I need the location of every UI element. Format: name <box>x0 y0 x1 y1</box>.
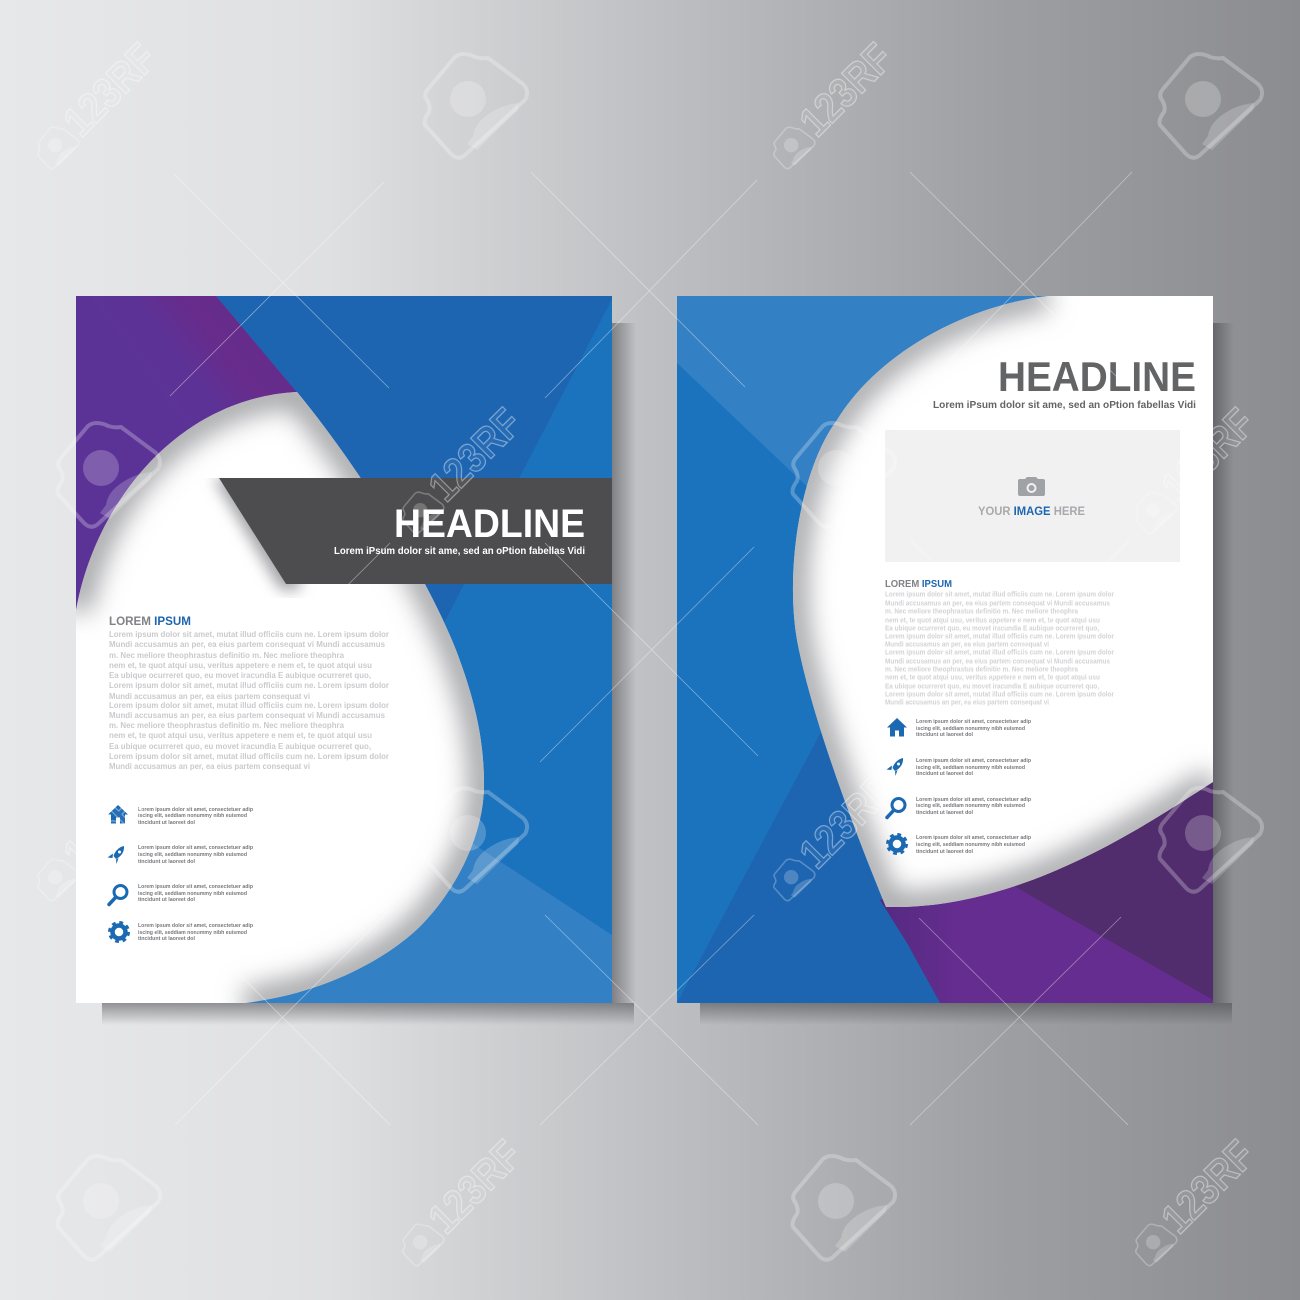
feature text 4: iscing elit, seddiam nonummy nibh euismod <box>138 930 247 936</box>
watermark: small camera marks <box>38 127 1177 1266</box>
pale blue upper facet <box>677 296 1100 575</box>
body text: Mundi accusamus an per, ea eius partem consequat vi <box>885 642 1049 648</box>
watermark: text marks: 123RF <box>1152 1131 1263 1242</box>
body text: nem et, te quot atqui usu, veritus appetere e nem et, te quot atqui usu <box>109 730 372 740</box>
feature text 2 <box>916 758 1031 777</box>
body text: Lorem ipsum dolor sit amet, mutat illud officiis cum ne. Lorem ipsum dolor <box>885 650 1114 656</box>
icon: gear <box>888 834 906 854</box>
body text <box>885 592 1114 706</box>
inner shadow of curve <box>76 392 484 1003</box>
body text: m. Nec meliore theophrastus definitio m. Nec meliore theophra <box>109 720 344 730</box>
body text: Mundi accusamus an per, ea eius partem consequat vi Mundi accusamus <box>109 710 385 720</box>
feature text 3 <box>138 884 253 903</box>
feature text 1: tincidunt ut laoreet dol <box>916 732 974 738</box>
watermark: text marks: 123RF <box>1152 399 1263 510</box>
watermark: text marks: 123RF <box>54 34 165 145</box>
panel: left brochure <box>76 296 612 1003</box>
feature text 3: Lorem ipsum dolor sit amet, consectetuer adip <box>138 884 253 890</box>
icon: house <box>108 805 128 824</box>
body text: Mundi accusamus an per, ea eius partem consequat vi Mundi accusamus <box>109 639 385 649</box>
feature text 3 <box>916 797 1031 816</box>
body text: Lorem ipsum dolor sit amet, mutat illud officiis cum ne. Lorem ipsum dolor <box>885 692 1114 698</box>
body text: m. Nec meliore theophrastus definitio m. Nec meliore theophra <box>109 650 344 660</box>
feature text 1 <box>916 719 1031 738</box>
body text: Lorem ipsum dolor sit amet, mutat illud officiis cum ne. Lorem ipsum dolor <box>885 592 1114 598</box>
icon: rocket <box>886 758 903 776</box>
feature text 4: Lorem ipsum dolor sit amet, consectetuer adip <box>138 923 253 929</box>
feature text 2 <box>138 845 253 865</box>
headline: HEADLINE <box>394 502 585 546</box>
feature text 2: iscing elit, seddiam nonummy nibh euismod <box>138 852 247 858</box>
feature text 3: iscing elit, seddiam nonummy nibh euismod <box>916 803 1025 809</box>
feature text 1: Lorem ipsum dolor sit amet, consectetuer adip <box>916 719 1031 725</box>
placeholder label: YOUR IMAGE HERE <box>978 504 1085 518</box>
feature text 3: iscing elit, seddiam nonummy nibh euismod <box>138 891 247 897</box>
watermark: diagonal cross lines <box>170 172 1132 1125</box>
body text: Mundi accusamus an per, ea eius partem consequat vi <box>109 761 310 771</box>
feature text 2: iscing elit, seddiam nonummy nibh euismod <box>916 765 1025 771</box>
feature text 1: Lorem ipsum dolor sit amet, consectetuer adip <box>138 807 253 813</box>
body text <box>109 629 390 771</box>
section heading: LOREM IPSUM <box>885 579 952 590</box>
body text: Lorem ipsum dolor sit amet, mutat illud officiis cum ne. Lorem ipsum dolor <box>109 629 390 639</box>
feature text 4: tincidunt ut laoreet dol <box>916 849 974 855</box>
sub headline: Lorem iPsum dolor sit ame, sed an oPtion fabellas Vidi <box>334 546 585 557</box>
feature text 4 <box>916 835 1031 855</box>
watermark: text marks: 123RF <box>419 399 530 510</box>
feature text 4: iscing elit, seddiam nonummy nibh euismod <box>916 842 1025 848</box>
body text: m. Nec meliore theophrastus definitio m. Nec meliore theophra <box>885 608 1078 616</box>
icon: camera <box>1018 477 1045 496</box>
watermark: text marks: 123RF <box>790 34 901 145</box>
panel: right brochure <box>677 296 1213 1003</box>
icon: rocket <box>108 846 124 864</box>
watermark: text marks: 123RF <box>790 766 901 877</box>
body text: Lorem ipsum dolor sit amet, mutat illud officiis cum ne. Lorem ipsum dolor <box>109 680 390 690</box>
body text: nem et, te quot atqui usu, veritus appetere e nem et, te quot atqui usu <box>885 618 1100 624</box>
feature text 3: tincidunt ut laoreet dol <box>138 897 196 903</box>
body text: Mundi accusamus an per, ea eius partem consequat vi <box>885 700 1049 706</box>
feature text 2: tincidunt ut laoreet dol <box>916 771 974 777</box>
feature text 1 <box>138 807 253 826</box>
dark headline band <box>219 478 612 584</box>
body text: m. Nec meliore theophrastus definitio m. Nec meliore theophra <box>885 666 1078 674</box>
blue base <box>76 296 612 1003</box>
body text: Lorem ipsum dolor sit amet, mutat illud officiis cum ne. Lorem ipsum dolor <box>109 700 390 710</box>
feature text 1: tincidunt ut laoreet dol <box>138 820 196 826</box>
inner shadow of curve <box>793 296 1213 907</box>
purple lower facet <box>880 780 1213 1003</box>
body text: Lorem ipsum dolor sit amet, mutat illud officiis cum ne. Lorem ipsum dolor <box>885 634 1114 640</box>
shadow left of band <box>213 478 300 590</box>
feature text 3: tincidunt ut laoreet dol <box>916 810 974 816</box>
blue base <box>677 296 1213 1003</box>
body text: Mundi accusamus an per, ea eius partem consequat vi <box>109 691 310 701</box>
icon: magnifier <box>109 886 127 904</box>
pale blue lower facet <box>240 730 612 1003</box>
purple corner <box>76 296 300 660</box>
body text: Ea ubique ocurreret quo, eu movet iracundia E aubique ocurreret quo, <box>885 626 1099 632</box>
feature text 1: iscing elit, seddiam nonummy nibh euismod <box>916 726 1025 732</box>
feature text 2: tincidunt ut laoreet dol <box>138 859 196 865</box>
dark purple facet <box>1000 775 1213 1000</box>
body text: nem et, te quot atqui usu, veritus appetere e nem et, te quot atqui usu <box>109 660 372 670</box>
icon: house <box>887 718 907 736</box>
feature text 4 <box>138 923 253 942</box>
left brochure shadow <box>102 323 636 1025</box>
body text: Mundi accusamus an per, ea eius partem consequat vi Mundi accusamus <box>885 658 1110 666</box>
feature text 2: Lorem ipsum dolor sit amet, consectetuer adip <box>138 845 253 851</box>
right brochure shadow <box>700 323 1234 1025</box>
sub headline: Lorem iPsum dolor sit ame, sed an oPtion fabellas Vidi <box>933 399 1196 411</box>
headline: HEADLINE <box>998 353 1196 400</box>
body text: Ea ubique ocurreret quo, eu movet iracundia E aubique ocurreret quo, <box>885 684 1099 690</box>
body text: Ea ubique ocurreret quo, eu movet iracundia E aubique ocurreret quo, <box>109 670 371 680</box>
white curved area <box>76 392 484 1003</box>
feature text 3: Lorem ipsum dolor sit amet, consectetuer adip <box>916 797 1031 803</box>
white curved area <box>793 296 1213 907</box>
image placeholder <box>885 430 1180 562</box>
watermark: text marks: 123RF <box>54 766 165 877</box>
icon: magnifier <box>887 798 905 818</box>
watermark: text marks: 123RF <box>419 1131 530 1242</box>
icon: gear <box>110 922 128 942</box>
body text: nem et, te quot atqui usu, veritus appetere e nem et, te quot atqui usu <box>885 674 1100 682</box>
dark blue lower facet <box>677 715 940 1003</box>
body text: Ea ubique ocurreret quo, eu movet iracundia E aubique ocurreret quo, <box>109 741 371 751</box>
body text: Lorem ipsum dolor sit amet, mutat illud officiis cum ne. Lorem ipsum dolor <box>109 751 390 761</box>
feature text 1: iscing elit, seddiam nonummy nibh euismod <box>138 813 247 819</box>
lighter blue facet <box>430 299 612 1003</box>
feature text 2: Lorem ipsum dolor sit amet, consectetuer adip <box>916 758 1031 764</box>
section heading: LOREM IPSUM <box>109 616 191 628</box>
body text: Mundi accusamus an per, ea eius partem consequat vi Mundi accusamus <box>885 600 1110 608</box>
feature text 4: tincidunt ut laoreet dol <box>138 936 196 942</box>
feature text 4: Lorem ipsum dolor sit amet, consectetuer adip <box>916 835 1031 841</box>
